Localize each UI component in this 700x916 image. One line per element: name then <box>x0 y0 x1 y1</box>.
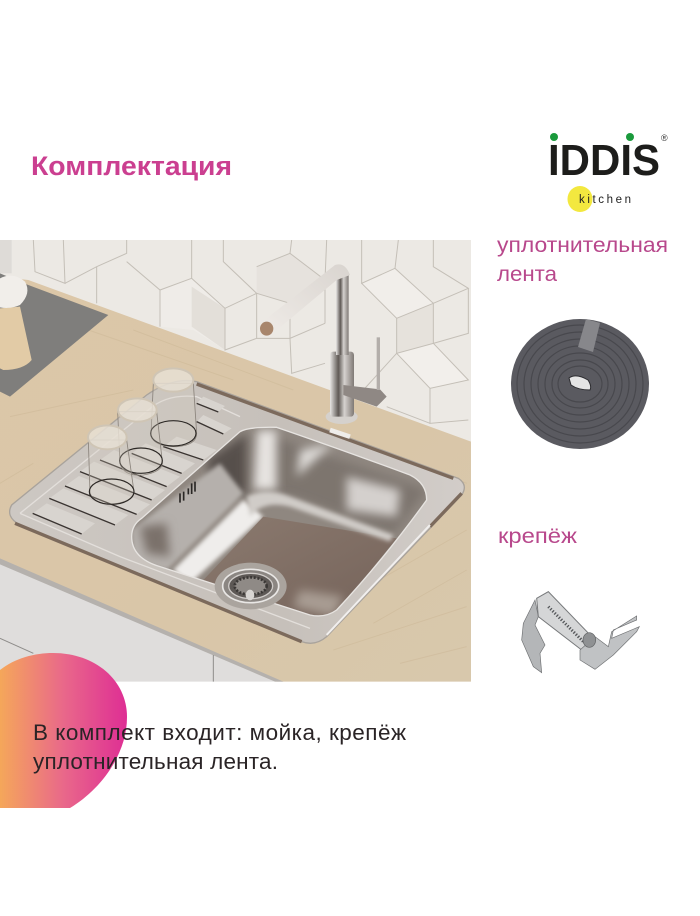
drain strainer <box>215 563 287 609</box>
grey mat <box>0 273 108 397</box>
logo wordmark: IDDIS <box>548 136 660 185</box>
drainboard ribs <box>33 397 232 534</box>
glass front <box>88 425 134 504</box>
wooden mill <box>0 240 32 370</box>
left wall <box>132 463 243 570</box>
tape outer <box>511 319 649 449</box>
bowl edge <box>132 427 427 616</box>
logo registered mark: ® <box>661 133 668 143</box>
label: fastener: крепёж <box>498 525 577 548</box>
label: sealing tape: уплотнительная <box>497 234 668 257</box>
faucet deck highlight <box>330 430 350 437</box>
logo green dots <box>550 133 634 141</box>
logo: IDDIS kitchen <box>548 133 668 212</box>
bowl floor <box>203 517 397 617</box>
white margin right of photo <box>471 232 700 692</box>
cabinet front <box>0 563 277 682</box>
faucet body <box>330 352 354 417</box>
faucet spout <box>267 264 350 332</box>
glass back <box>151 368 197 447</box>
clip knob <box>583 633 596 647</box>
fastener clip <box>522 592 639 673</box>
wood grain <box>0 313 467 663</box>
clip toothed bar <box>537 592 593 650</box>
sealing tape roll <box>511 319 649 449</box>
wall tiles <box>0 240 471 447</box>
clip right bracket <box>580 616 639 669</box>
glasses <box>88 368 197 504</box>
gradient circle <box>0 653 127 808</box>
logo kitchen text: kitchen <box>579 194 631 206</box>
rim groove <box>15 384 462 642</box>
label: sealing tape: лента <box>497 263 557 286</box>
faucet lever <box>343 385 387 407</box>
title: Комплектация <box>31 151 232 181</box>
faucet base <box>326 409 358 424</box>
clip left jaw <box>522 600 545 673</box>
faucet riser <box>336 275 349 355</box>
infographic page <box>0 133 668 808</box>
tape rings <box>517 325 643 443</box>
white panel under photo <box>0 682 700 916</box>
description text: уплотнительная лента. <box>33 749 278 774</box>
tape centre hole <box>569 376 591 390</box>
glass middle <box>118 398 162 475</box>
faucet <box>260 264 387 424</box>
photo: sink on the countertop <box>0 240 471 682</box>
countertop <box>0 277 471 682</box>
sink rim <box>10 381 464 643</box>
tape end tab <box>578 319 600 352</box>
logo yellow spot <box>568 186 592 212</box>
overflow slots <box>180 482 195 503</box>
drainboard inner edge <box>20 396 310 628</box>
sink bowl <box>132 428 426 616</box>
description text: В комплект входит: мойка, крепёж <box>33 720 406 745</box>
far wall reflections <box>272 440 423 532</box>
